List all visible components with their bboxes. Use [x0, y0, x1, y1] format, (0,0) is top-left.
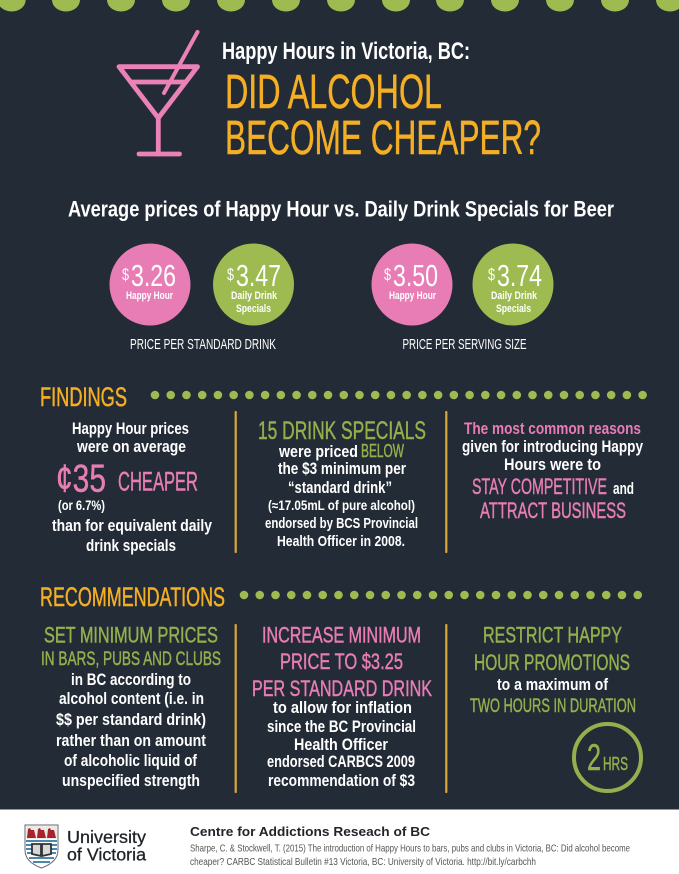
recommendation: set minimum prices [41, 623, 221, 790]
finding: 15 drink specials [258, 417, 426, 550]
logo: university crest [25, 825, 58, 868]
recommendation: increase minimum price [252, 623, 432, 790]
recommendation: set minimum prices: of alcoholic liquid of [64, 752, 197, 770]
recommendation: increase minimum price: Health Officer [294, 736, 388, 754]
finding: common reasons [462, 419, 644, 523]
finding: common reasons: STAY COMPETITIVE [472, 474, 607, 499]
price circle: daily specials 3.74: $ [488, 265, 495, 284]
finding: 35 cents cheaper: (or 6.7%) [58, 498, 105, 513]
finding: 15 drink specials: BELOW [361, 441, 404, 461]
recommendation: increase minimum price: PER STANDARD DRINK [252, 676, 432, 701]
panel: price per serving size [372, 244, 554, 353]
citation: cheaper? CARBC Statistical Bulletin #13 Victoria, BC: University of Victoria. http://bit.ly/carbchh [190, 856, 536, 868]
recommendation: increase minimum price: since the BC Provincial [267, 718, 416, 736]
price circle: daily specials 3.47: 3.47 [236, 258, 281, 293]
price circle: happy hour 3.26 [110, 244, 190, 326]
icon: martini glass [119, 32, 198, 154]
price circle: daily specials 3.74 [472, 244, 554, 326]
heading: recommendations: RECOMMENDATIONS [40, 582, 225, 612]
finding: 35 cents cheaper: than for equivalent daily [52, 517, 213, 535]
price circle: daily specials 3.47: Specials [236, 303, 271, 315]
recommendation: set minimum prices: SET MINIMUM PRICES [44, 623, 218, 648]
icon: 2 hours badge: 2 [587, 737, 601, 778]
centre name: Centre for Addictions Reseach of BC [190, 824, 431, 839]
price circle: daily specials 3.74: Specials [496, 303, 531, 315]
price circle: happy hour 3.50: $ [384, 265, 391, 284]
finding: 15 drink specials: “standard drink” [288, 479, 392, 497]
logo wordmark: University [67, 827, 146, 847]
finding: 15 drink specials: the $3 minimum per [278, 460, 406, 478]
finding: 15 drink specials: Health Officer in 2008. [277, 533, 405, 550]
heading: findings: FINDINGS [40, 382, 127, 412]
price circle: daily specials 3.74: 3.74 [497, 258, 542, 293]
finding: 15 drink specials: were priced [278, 443, 358, 461]
finding: 15 drink specials: endorsed by BCS Provincial [265, 515, 418, 532]
recommendation: set minimum prices: $$ per standard drink) [56, 711, 206, 729]
logo wordmark: of Victoria [67, 844, 146, 864]
finding: common reasons: and [613, 480, 634, 498]
title: DID ALCOHOL [225, 66, 442, 119]
citation [190, 842, 630, 868]
finding: 35 cents cheaper: ¢35 [56, 458, 106, 500]
caption: PRICE PER SERVING SIZE [402, 336, 526, 353]
recommendation: increase minimum price: to allow for inflation [273, 699, 412, 717]
finding: 15 drink specials: (≈17.05mL of pure alcohol) [268, 498, 415, 513]
recommendation: set minimum prices: in BC according to [71, 671, 191, 689]
recommendation: restrict happy hour: to a maximum of [497, 676, 608, 694]
recommendation: increase minimum price: endorsed CARBCS 2009 [267, 753, 415, 771]
price circle: happy hour 3.26: Happy Hour [126, 290, 174, 302]
icon: 2 hours badge [574, 724, 641, 791]
logo wordmark [67, 827, 146, 864]
recommendation: increase minimum price: recommendation of $3 [268, 772, 415, 790]
finding: common reasons: Hours were to [504, 456, 601, 474]
finding: 35 cents cheaper: CHEAPER [118, 466, 198, 496]
recommendation: set minimum prices: IN BARS, PUBS AND CLUBS [41, 649, 221, 670]
title [222, 38, 541, 165]
finding: common reasons: given for introducing Happy [462, 438, 644, 456]
price circle: happy hour 3.50: 3.50 [393, 258, 438, 293]
finding: 35 cents cheaper: drink specials [86, 537, 176, 555]
price circle: happy hour 3.26: 3.26 [131, 258, 176, 293]
recommendation: increase minimum price: INCREASE MINIMUM [262, 623, 421, 648]
recommendation: set minimum prices: alcohol content (i.e. in [59, 690, 204, 708]
finding: 35 cents cheaper [52, 420, 213, 555]
finding: 35 cents cheaper: were on average [76, 438, 186, 456]
price circle: happy hour 3.50: Happy Hour [389, 290, 437, 302]
price circle: happy hour 3.50 [372, 244, 452, 326]
icon: 2 hours badge: HRS [603, 754, 628, 774]
price circle: daily specials 3.47 [213, 244, 294, 326]
price circle: daily specials 3.47: $ [227, 265, 234, 284]
recommendation: set minimum prices: rather than on amount [56, 732, 206, 750]
recommendation: set minimum prices: unspecified strength [62, 772, 200, 790]
finding: common reasons: The most common reasons [464, 419, 641, 438]
panel: price per standard drink [110, 244, 294, 353]
price circle: daily specials 3.47: Daily Drink [231, 290, 278, 302]
price circle: happy hour 3.26: $ [122, 265, 129, 284]
caption: PRICE PER STANDARD DRINK [130, 336, 276, 353]
recommendation: increase minimum price: PRICE TO $3.25 [280, 649, 403, 674]
recommendation: restrict happy hour: RESTRICT HAPPY [483, 623, 622, 648]
title: Happy Hours in Victoria, BC: [222, 38, 470, 65]
price circle: daily specials 3.74: Daily Drink [491, 290, 538, 302]
footer [0, 810, 679, 874]
finding: 15 drink specials: 15 DRINK SPECIALS [258, 417, 426, 445]
finding: 35 cents cheaper: Happy Hour prices [72, 420, 189, 438]
recommendation: restrict happy hour [470, 623, 636, 717]
